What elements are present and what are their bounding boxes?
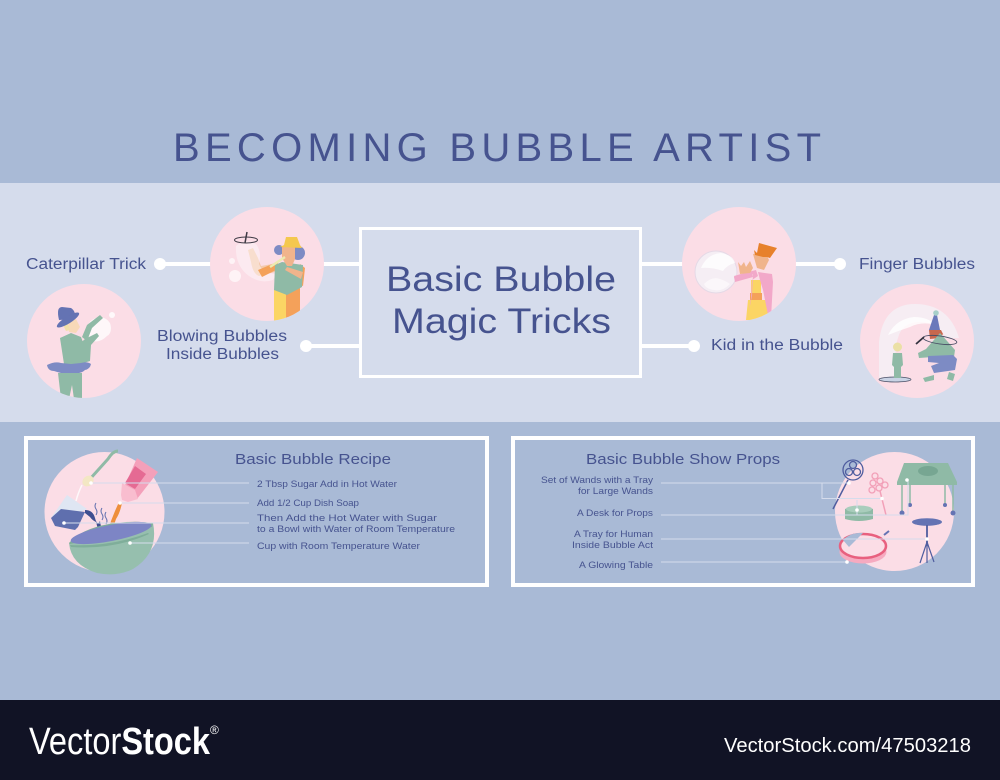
icon: finger bubble performer [682, 207, 796, 321]
logo: VectorStock [29, 721, 211, 763]
heading: recipe: Basic Bubble Recipe [235, 452, 391, 468]
panel: recipe [26, 438, 487, 585]
title: BECOMING BUBBLE ARTIST [173, 126, 821, 170]
icon: bubble blower with wand [210, 207, 324, 322]
props list: A Glowing Table [579, 560, 653, 571]
label: Caterpillar Trick: Caterpillar Trick [26, 256, 146, 273]
central heading box [360, 228, 640, 376]
heading: props: Basic Bubble Show Props [586, 452, 780, 468]
recipe steps [257, 479, 455, 552]
registered mark: ® [210, 723, 219, 737]
recipe steps: Cup with Room Temperature Water [257, 541, 420, 552]
props list [541, 475, 653, 571]
stock id: VectorStock.com/47503218 [724, 735, 971, 757]
label: Finger Bubbles: Finger Bubbles [859, 256, 975, 273]
icon: mixing bowl illustration [44, 451, 164, 574]
footer bar [0, 700, 1000, 780]
panel: tricks band [0, 183, 1000, 422]
central heading box: Basic Bubble [386, 260, 616, 299]
icon: props illustration [833, 452, 957, 571]
props list: Set of Wands with a Tray [541, 475, 653, 486]
props list: A Tray for Human [574, 529, 653, 540]
label: Blowing Bubbles Inside Bubbles: Inside Bubbles [166, 346, 279, 363]
label: Blowing Bubbles Inside Bubbles [157, 328, 287, 363]
central heading box: Magic Tricks [392, 302, 611, 341]
icon: child in tutu [27, 284, 141, 399]
label: Kid in the Bubble: Kid in the Bubble [711, 337, 843, 354]
props list: A Desk for Props [577, 508, 653, 519]
callout lines: recipe [62, 481, 249, 545]
props list: for Large Wands [578, 486, 653, 497]
recipe steps: 2 Tbsp Sugar Add in Hot Water [257, 479, 397, 490]
callout lines: props [661, 478, 929, 564]
icon: kid in the bubble [860, 284, 974, 398]
panel: props [513, 438, 973, 585]
recipe steps: Then Add the Hot Water with Sugar [257, 513, 437, 524]
props list: Inside Bubble Act [572, 540, 653, 551]
label: Blowing Bubbles Inside Bubbles: Blowing Bubbles [157, 328, 287, 345]
recipe steps: to a Bowl with Water of Room Temperature [257, 524, 455, 535]
recipe steps: Add 1/2 Cup Dish Soap [257, 498, 359, 509]
